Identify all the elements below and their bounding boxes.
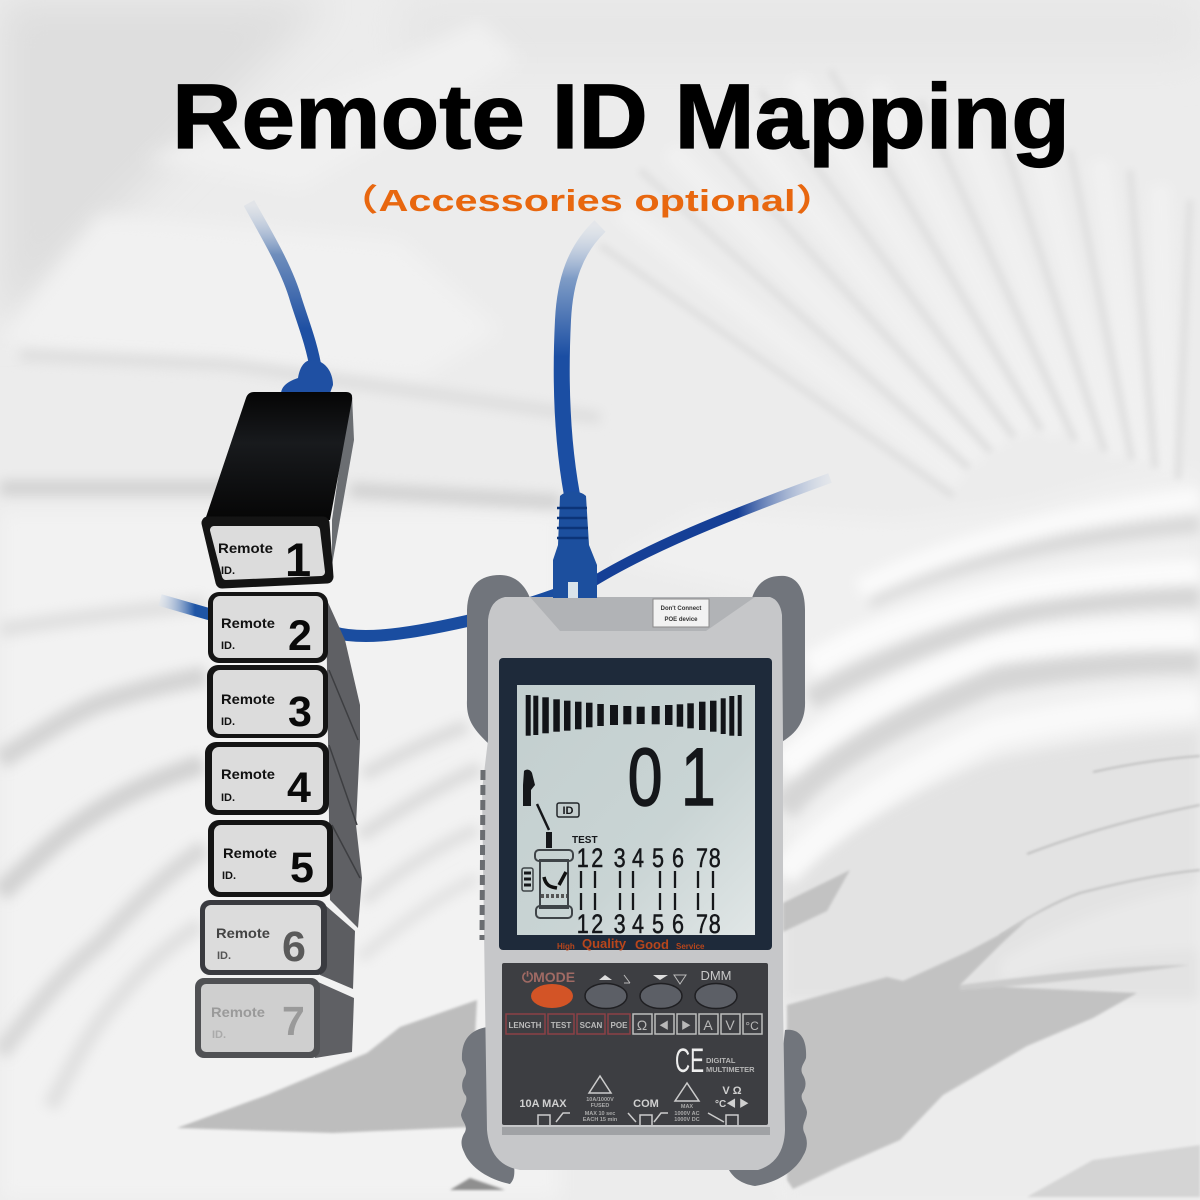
digital multimeter text bbox=[706, 1056, 755, 1074]
wire map upper digits: 12345678 bbox=[577, 844, 721, 874]
red mode boxes bbox=[506, 1014, 630, 1034]
cable: blue cable to remote module bbox=[249, 203, 316, 370]
wire map dashes bbox=[581, 871, 713, 910]
mode button bbox=[531, 984, 573, 1008]
remote module 6: ID. bbox=[217, 950, 231, 962]
cable: horizontal blue cable right bbox=[580, 478, 830, 590]
remote module 1: 1 bbox=[285, 533, 311, 586]
mode box labels: POE bbox=[611, 1021, 628, 1030]
meter function labels: °C bbox=[745, 1019, 759, 1033]
meter function labels: A bbox=[703, 1017, 713, 1033]
meter function boxes bbox=[633, 1014, 762, 1034]
title: Remote ID Mapping bbox=[172, 66, 1070, 168]
wire map lower digits: 12345678 bbox=[577, 910, 721, 940]
remote module 2: ID. bbox=[221, 640, 235, 652]
remote module 3: 3 bbox=[288, 688, 312, 736]
signal bar row bbox=[526, 695, 742, 736]
warning label: POE device bbox=[664, 617, 698, 623]
remote module 5 bbox=[208, 820, 333, 897]
remote module 2 bbox=[208, 592, 328, 663]
remote module 6: Remote bbox=[216, 925, 270, 941]
icon: cable plug bbox=[523, 770, 552, 848]
icon: remote unit and battery bbox=[522, 850, 573, 918]
remote module 1: Remote bbox=[218, 540, 273, 556]
remote module 2: Remote bbox=[221, 615, 275, 631]
remote module 4 bbox=[205, 742, 329, 815]
warning label: Don't Connect bbox=[661, 606, 701, 612]
subtitle: accessories optional: （Accessories optional） bbox=[337, 183, 837, 218]
port small print: 1000V AC bbox=[674, 1111, 700, 1117]
remote module connector boot bbox=[281, 360, 333, 393]
port small print bbox=[583, 1097, 700, 1123]
remote module 7 bbox=[195, 978, 320, 1058]
down button bbox=[640, 984, 682, 1008]
screen bezel bbox=[499, 658, 772, 950]
cable: blue cable to tester top bbox=[562, 226, 600, 495]
top port recess bbox=[530, 597, 755, 631]
remote module 2: 2 bbox=[288, 612, 312, 660]
meter function labels bbox=[637, 1017, 759, 1033]
up button label bbox=[599, 975, 630, 983]
tester device bbox=[461, 575, 807, 1186]
port labels: V Ω bbox=[722, 1085, 742, 1097]
port small print: 10A/1000V bbox=[586, 1097, 614, 1103]
remote module 5: 5 bbox=[290, 844, 314, 892]
LCD screen bbox=[517, 685, 755, 940]
remote module 1: ID. bbox=[221, 565, 235, 577]
lower ledge bbox=[502, 1127, 770, 1135]
remote module 7: 7 bbox=[282, 998, 305, 1044]
remote module 3: ID. bbox=[221, 716, 235, 728]
control panel bbox=[502, 963, 768, 1125]
slogan: Quality bbox=[582, 936, 627, 951]
mode box labels: LENGTH bbox=[509, 1021, 542, 1030]
port small print: EACH 15 min bbox=[583, 1117, 618, 1123]
port small print: 1000V DC bbox=[674, 1117, 700, 1123]
cable: horizontal blue cable middle bbox=[333, 580, 590, 636]
port small print: MAX 10 sec bbox=[585, 1111, 615, 1117]
TEST label: TEST bbox=[572, 835, 598, 846]
port small print: FUSED bbox=[591, 1103, 609, 1109]
warning triangles bbox=[589, 1076, 699, 1101]
meter function labels: Ω bbox=[637, 1017, 647, 1033]
RJ45 plug on tester bbox=[553, 492, 597, 598]
CE mark: CE bbox=[675, 1042, 704, 1080]
port labels: °C◀ ▶ bbox=[715, 1098, 749, 1110]
slogan bbox=[557, 936, 705, 952]
down button label bbox=[653, 975, 686, 984]
port labels: 10A MAX bbox=[519, 1098, 567, 1110]
mode box labels: TEST bbox=[551, 1021, 571, 1030]
port labels bbox=[519, 1085, 749, 1110]
DMM button bbox=[695, 984, 737, 1008]
slogan: Good bbox=[635, 937, 669, 952]
port markers bbox=[538, 1113, 738, 1125]
remote module 4: Remote bbox=[221, 766, 275, 782]
mode label: ⏻MODE bbox=[522, 969, 575, 985]
mode box labels bbox=[509, 1021, 628, 1030]
digital multimeter text: MULTIMETER bbox=[706, 1065, 755, 1074]
ID badge bbox=[557, 803, 579, 817]
remote module 1 body bbox=[332, 393, 354, 565]
slogan: Service bbox=[676, 942, 705, 951]
ID number readout: 01 bbox=[628, 732, 716, 823]
module bodies: side shading bbox=[315, 598, 362, 1058]
remote module 5: ID. bbox=[222, 870, 236, 882]
up button bbox=[585, 984, 627, 1008]
device body bbox=[482, 597, 785, 1170]
remote module 1 bbox=[208, 523, 327, 586]
remote module 7: ID. bbox=[212, 1029, 226, 1041]
remote module 5: Remote bbox=[223, 845, 277, 861]
slogan: High bbox=[557, 942, 575, 951]
remote module 6 bbox=[200, 900, 327, 975]
port labels: COM bbox=[633, 1098, 659, 1110]
remote module 4: 4 bbox=[287, 764, 311, 812]
rubber bumpers bbox=[461, 575, 807, 1186]
warning label bbox=[653, 599, 709, 627]
mode box labels: SCAN bbox=[580, 1021, 603, 1030]
cable: horizontal blue cable left bbox=[160, 600, 212, 615]
meter function labels: ▶ bbox=[681, 1020, 691, 1032]
remote module 4: ID. bbox=[221, 792, 235, 804]
remote module 3 bbox=[207, 665, 328, 738]
DMM label: DMM bbox=[700, 968, 732, 983]
remote module 7: Remote bbox=[211, 1004, 265, 1020]
remote ID module stack bbox=[195, 392, 362, 1058]
remote module 3: Remote bbox=[221, 691, 275, 707]
ID badge: ID bbox=[562, 805, 574, 817]
port small print: MAX bbox=[681, 1104, 693, 1110]
meter function labels: V bbox=[725, 1017, 735, 1033]
side grip bbox=[482, 770, 483, 940]
remote module 6: 6 bbox=[282, 923, 306, 971]
digital multimeter text: DIGITAL bbox=[706, 1056, 736, 1065]
meter function labels: ◀ bbox=[659, 1020, 669, 1032]
